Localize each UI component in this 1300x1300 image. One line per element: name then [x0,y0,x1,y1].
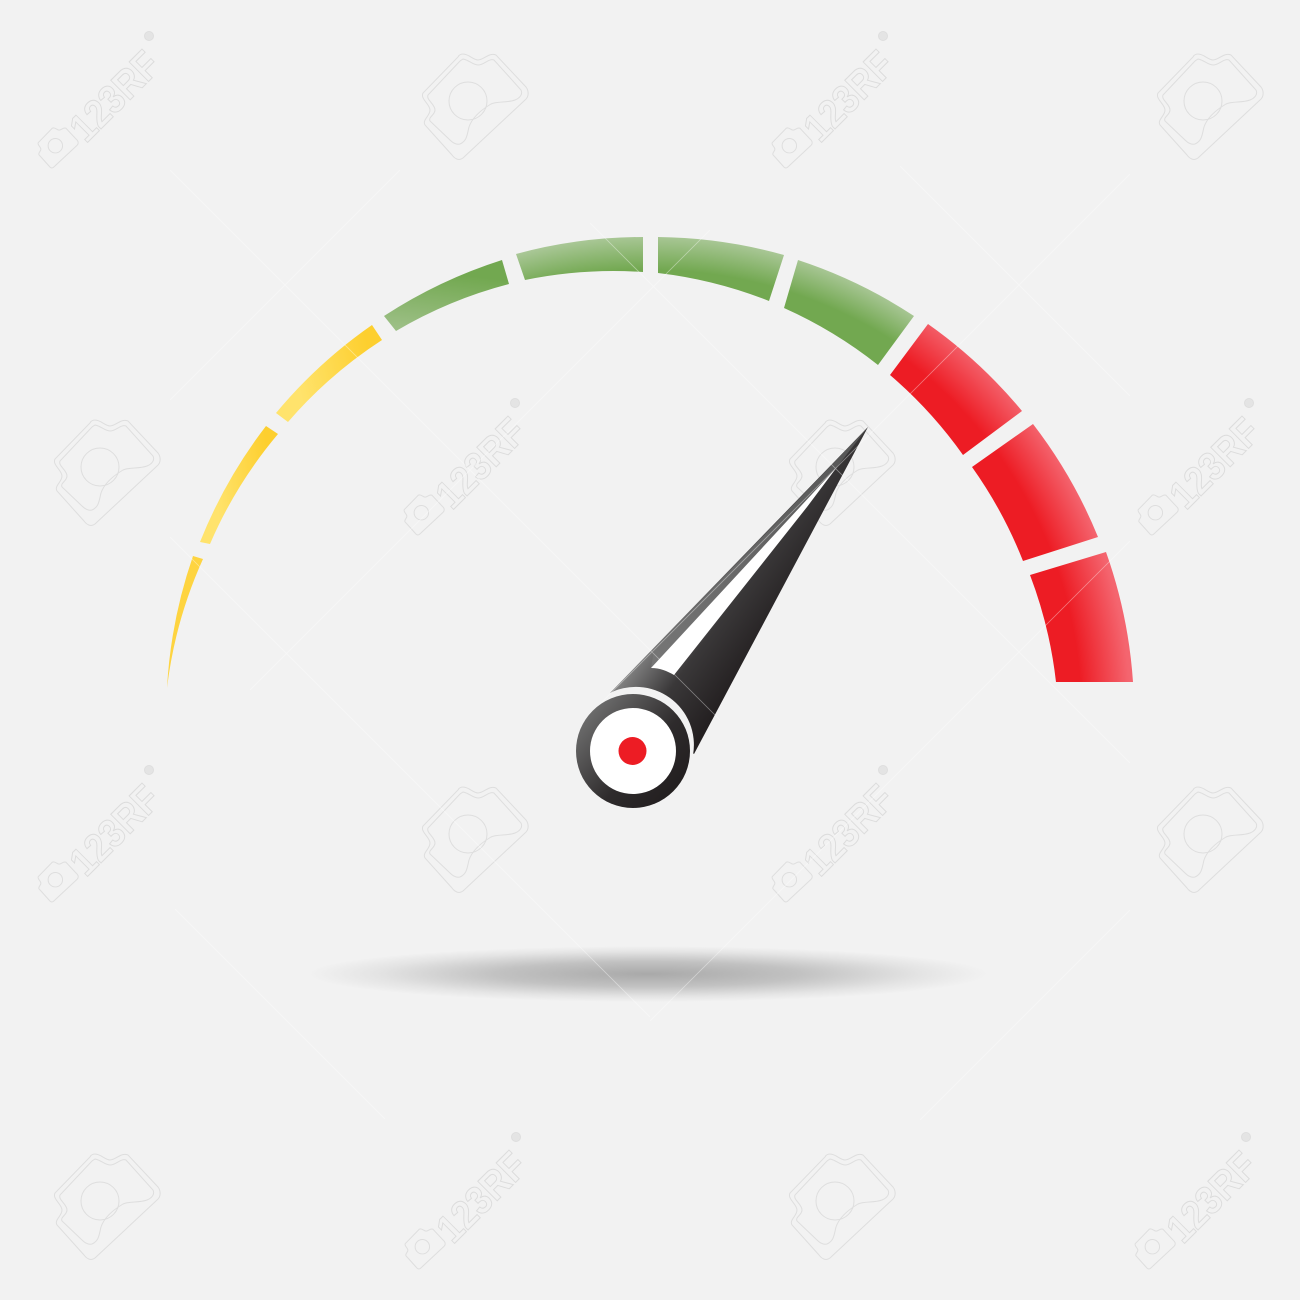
hub red dot [618,737,646,765]
hub outer ring [576,694,690,808]
ground shadow [308,946,988,1002]
needle [576,427,868,808]
red zone segments [890,324,1133,682]
watermark: 123RF wordmarks: 123RF [1158,1144,1266,1251]
watermark: 123RF wordmarks: 123RF [428,1144,536,1251]
watermark: 123RF wordmarks: 123RF [795,43,903,150]
needle body [610,427,868,754]
watermark: 123RF wordmarks: 123RF [1161,410,1269,517]
watermark: 123RF wordmarks: 123RF [61,777,169,884]
hub white disc [590,708,676,794]
watermark: 123RF wordmarks: 123RF [427,410,535,517]
gauge arc [167,237,1133,688]
watermark: 123RF wordmarks: 123RF [61,43,169,150]
needle white collar [608,687,694,755]
needle white highlight [651,467,837,675]
needle upper stripe [651,427,868,668]
green zone segments [384,237,914,365]
watermark: 123RF wordmarks: 123RF [795,777,903,884]
yellow zone segments [167,325,382,688]
